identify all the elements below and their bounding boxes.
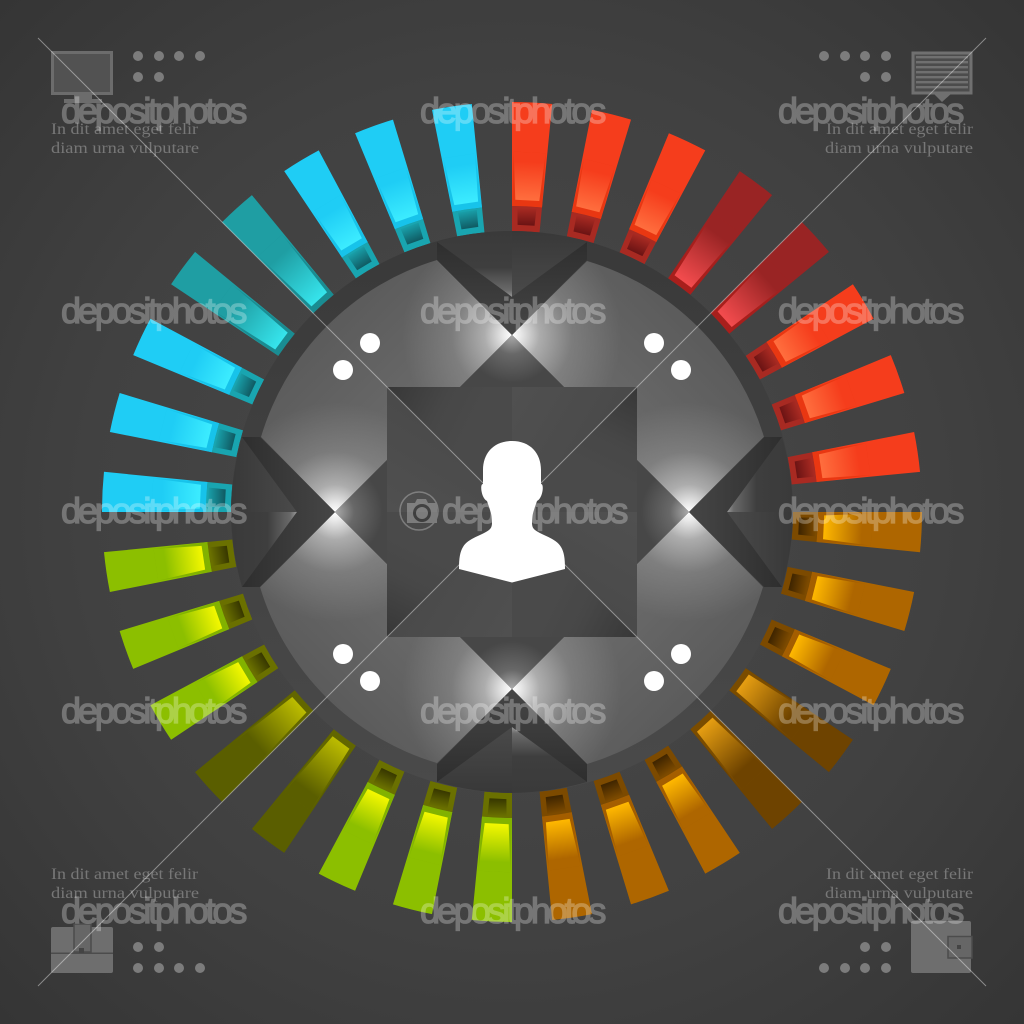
text: top right: In dit amet eget felir: [826, 121, 974, 138]
bar: teal 2: [222, 194, 343, 314]
dots: top right: [819, 51, 891, 82]
radial bar ring: [102, 102, 922, 922]
watermark: depositphotos: [61, 690, 246, 731]
bar: red 6: [786, 432, 922, 497]
icon: person silhouette: [459, 441, 565, 582]
dots: bottom left: [133, 942, 205, 973]
text: top right: [825, 121, 974, 157]
watermark: depositphotos: [778, 90, 963, 131]
bar: teal 1: [171, 251, 302, 357]
icon: document with lines: [913, 53, 971, 102]
bar: cyan 5: [355, 118, 442, 254]
white dots on disc: [333, 333, 691, 691]
bar: amber 4: [634, 745, 740, 875]
text: bottom left: diam urna vulputare: [51, 885, 199, 902]
watermark: depositphotos: [61, 90, 246, 131]
watermark: depositphotos: [61, 890, 246, 931]
bar: amber 6: [527, 786, 592, 922]
text: top left: [51, 121, 199, 157]
text: top left: diam urna vulputare: [51, 140, 199, 157]
watermark: depositphotos: [442, 490, 627, 531]
bar: dark amber 2: [681, 710, 802, 830]
bar: amber 3: [755, 619, 891, 706]
bar: red 5: [770, 355, 906, 442]
bar: green 1: [472, 792, 512, 922]
watermark: depositphotos: [778, 890, 963, 931]
dots: top left: [133, 51, 205, 82]
bar: cyan 4: [284, 149, 390, 279]
bar: dark red 1: [667, 171, 773, 302]
watermark: depositphotos: [420, 690, 605, 731]
bar: red 3: [619, 133, 706, 269]
icon: briefcase: [51, 924, 113, 973]
bar: red 4: [745, 284, 875, 390]
text: bottom left: In dit amet eget felir: [51, 866, 199, 883]
watermark: [61, 90, 963, 931]
text: top left: In dit amet eget felir: [51, 121, 199, 138]
watermark: depositphotos: [420, 890, 605, 931]
icon: wallet: [911, 921, 972, 973]
bar: green 6: [102, 527, 238, 592]
bar: amber 2: [778, 567, 914, 631]
watermark: depositphotos: [420, 290, 605, 331]
bar: cyan 3: [133, 318, 269, 405]
bar: red 2: [567, 110, 631, 246]
bar: cyan 6: [432, 102, 497, 238]
text: bottom left: [51, 866, 199, 902]
watermark: depositphotos: [778, 290, 963, 331]
text: top right: diam urna vulputare: [825, 140, 973, 157]
bar: dark amber 1: [722, 667, 853, 773]
watermark: depositphotos: [778, 690, 963, 731]
bar: red 1: [512, 102, 552, 232]
bar: amber 1: [792, 512, 922, 552]
watermark: depositphotos: [61, 290, 246, 331]
watermark: depositphotos: [778, 490, 963, 531]
bar: dark red 2: [710, 222, 830, 343]
central faceted disc: [225, 225, 799, 799]
dots: bottom right: [819, 942, 891, 973]
text: bottom right: diam urna vulputare: [825, 885, 973, 902]
bar: olive 1: [251, 722, 357, 853]
bar: cyan 1: [102, 472, 232, 512]
text: bottom right: In dit amet eget felir: [826, 866, 974, 883]
bar: green 2: [393, 778, 457, 914]
bar: green 4: [149, 634, 279, 740]
bar: green 5: [118, 582, 254, 669]
icon: monitor: [52, 52, 112, 103]
text: bottom right: [825, 866, 974, 902]
bar: amber 5: [582, 770, 669, 906]
bar: olive 2: [194, 681, 314, 802]
bar: cyan 2: [110, 393, 246, 457]
watermark: depositphotos: [420, 90, 605, 131]
watermark: depositphotos: [61, 490, 246, 531]
bar: green 3: [318, 755, 405, 891]
